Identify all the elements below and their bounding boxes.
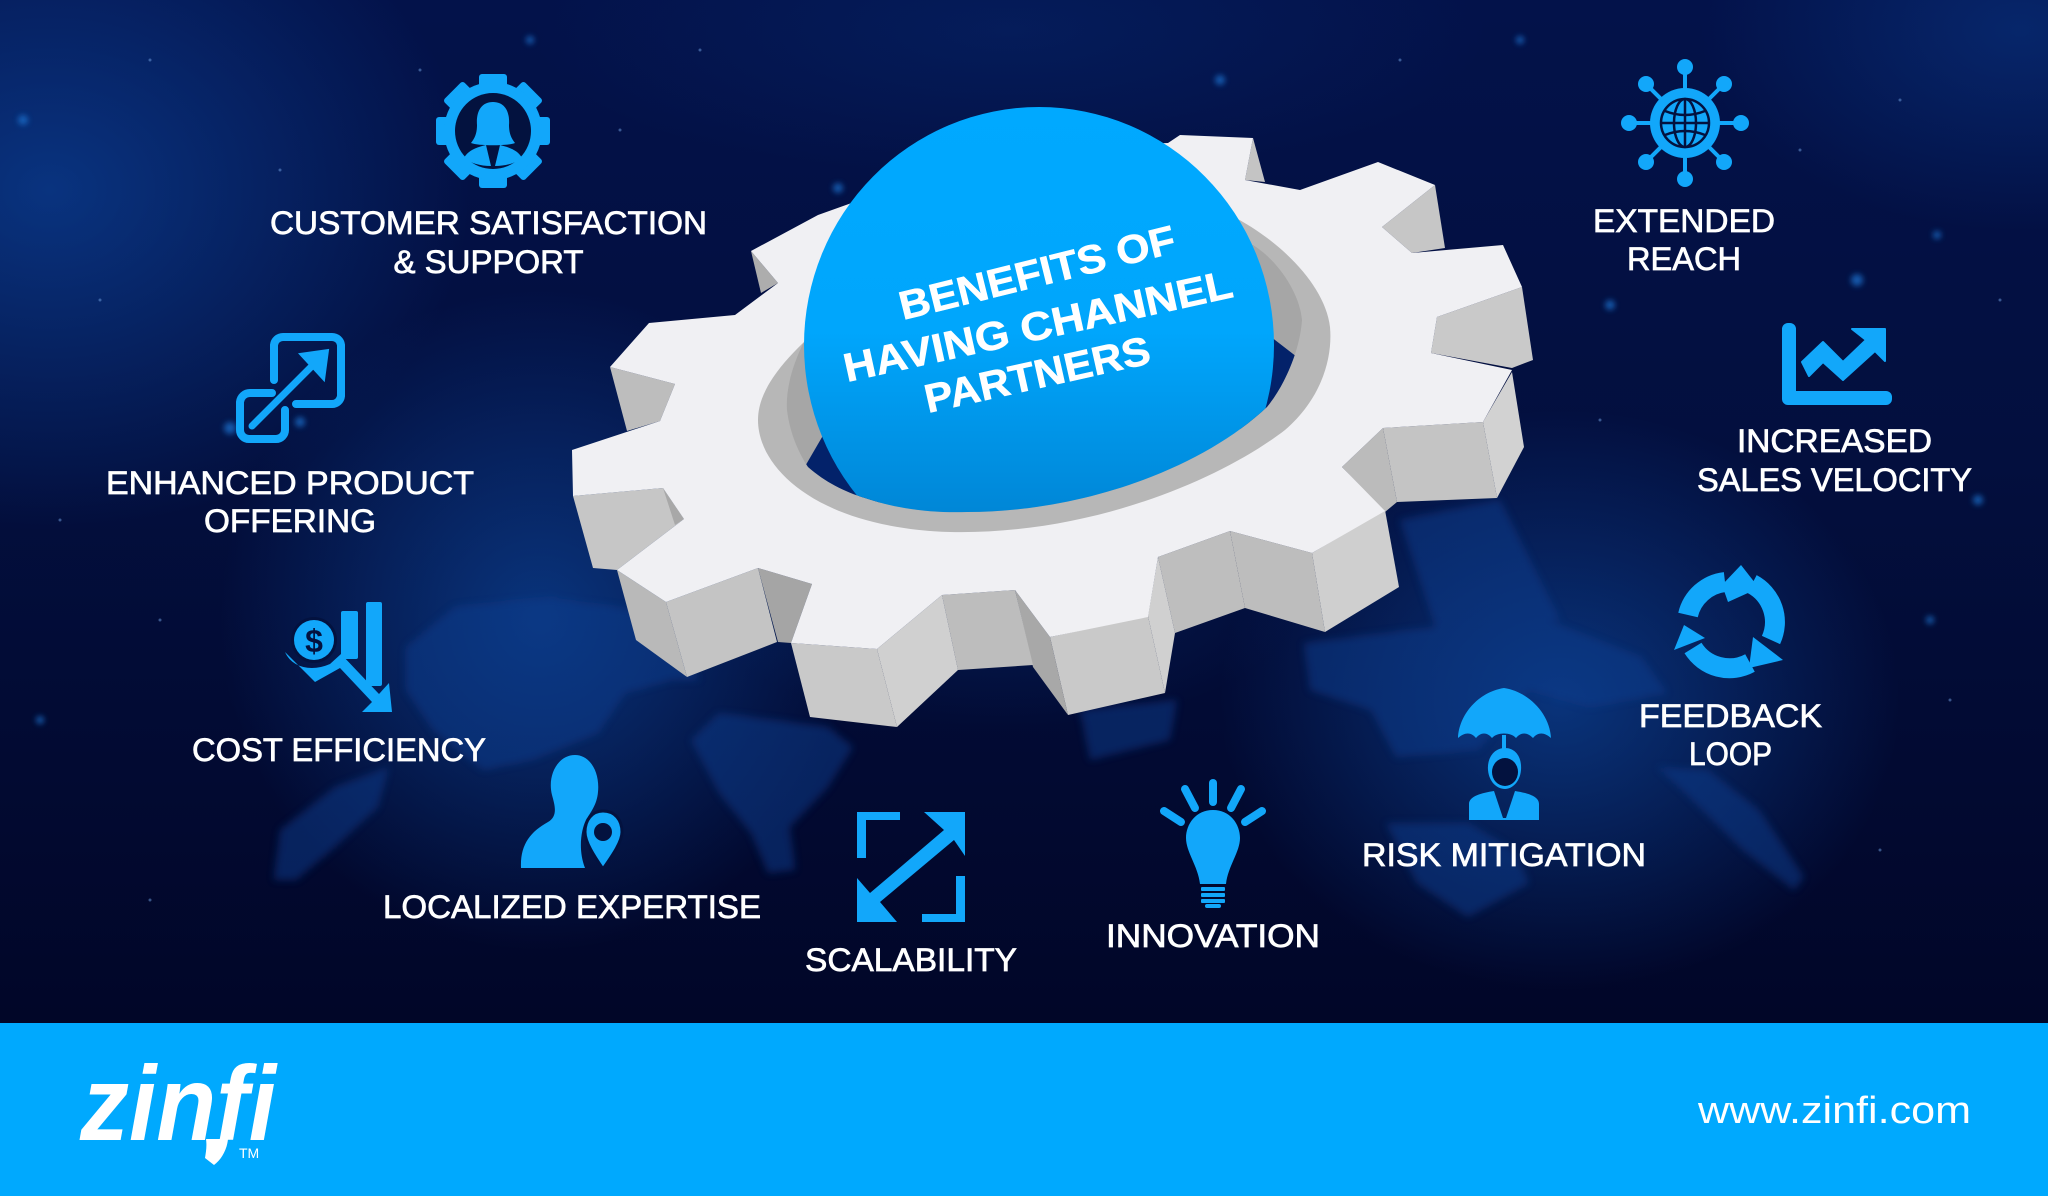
label: feedback loop: FEEDBACK bbox=[1639, 698, 1822, 734]
icon: cost efficiency: $ bbox=[305, 623, 323, 659]
icon: risk mitigation umbrella and person bbox=[1458, 688, 1551, 820]
icon: increased sales velocity chart bbox=[1782, 323, 1892, 405]
website url: www.zinfi.com bbox=[1697, 1090, 1971, 1132]
label: customer satisfaction: & SUPPORT bbox=[394, 244, 584, 280]
title bbox=[839, 218, 1237, 422]
label: enhanced product offering: OFFERING bbox=[204, 503, 376, 539]
label: cost efficiency: COST EFFICIENCY bbox=[192, 732, 486, 768]
label: increased sales velocity: INCREASED bbox=[1737, 423, 1932, 459]
icon: extended reach globe network bbox=[1621, 59, 1749, 187]
title: BENEFITS OF bbox=[895, 218, 1180, 329]
gear side faces bbox=[573, 138, 1533, 727]
label: increased sales velocity: SALES VELOCITY bbox=[1697, 462, 1972, 498]
label: enhanced product offering bbox=[106, 465, 474, 539]
title: HAVING CHANNEL bbox=[839, 263, 1237, 391]
title: PARTNERS bbox=[920, 329, 1154, 422]
gear hole ring bbox=[758, 200, 1330, 532]
label: innovation: INNOVATION bbox=[1106, 918, 1320, 954]
gear top face bbox=[572, 135, 1522, 649]
icon: feedback loop arrows bbox=[1674, 565, 1783, 668]
label: extended reach: EXTENDED bbox=[1593, 203, 1775, 239]
label: extended reach bbox=[1593, 203, 1775, 277]
label: increased sales velocity bbox=[1697, 423, 1972, 498]
world map: dotted continents bbox=[274, 500, 1804, 917]
label: extended reach: REACH bbox=[1627, 241, 1741, 277]
icon: scalability bbox=[857, 812, 965, 922]
label: localized expertise: LOCALIZED EXPERTISE bbox=[383, 889, 761, 925]
label: customer satisfaction bbox=[270, 205, 707, 280]
icon: enhanced product offering bbox=[240, 337, 341, 439]
label: scalability: SCALABILITY bbox=[805, 942, 1017, 978]
sphere bbox=[804, 107, 1274, 512]
gear hole interior bbox=[787, 200, 1302, 512]
icon: localized expertise bbox=[521, 755, 622, 869]
logo: zinfi: TM bbox=[239, 1145, 259, 1161]
label: risk mitigation: RISK MITIGATION bbox=[1362, 837, 1646, 873]
logo: zinfi: zinfi bbox=[79, 1045, 278, 1163]
central gear with sphere bbox=[572, 107, 1533, 727]
label: feedback loop bbox=[1639, 698, 1822, 772]
footer bar bbox=[0, 1023, 2048, 1196]
hole openings showing background bbox=[806, 339, 1295, 503]
label: customer satisfaction: CUSTOMER SATISFACTION bbox=[270, 205, 707, 241]
icon: cost efficiency bbox=[285, 602, 392, 712]
label: enhanced product offering: ENHANCED PRODUCT bbox=[106, 465, 474, 501]
label: feedback loop: LOOP bbox=[1689, 736, 1772, 772]
icon: innovation bulb bbox=[1164, 783, 1262, 908]
icon: customer satisfaction gear bbox=[436, 74, 550, 188]
